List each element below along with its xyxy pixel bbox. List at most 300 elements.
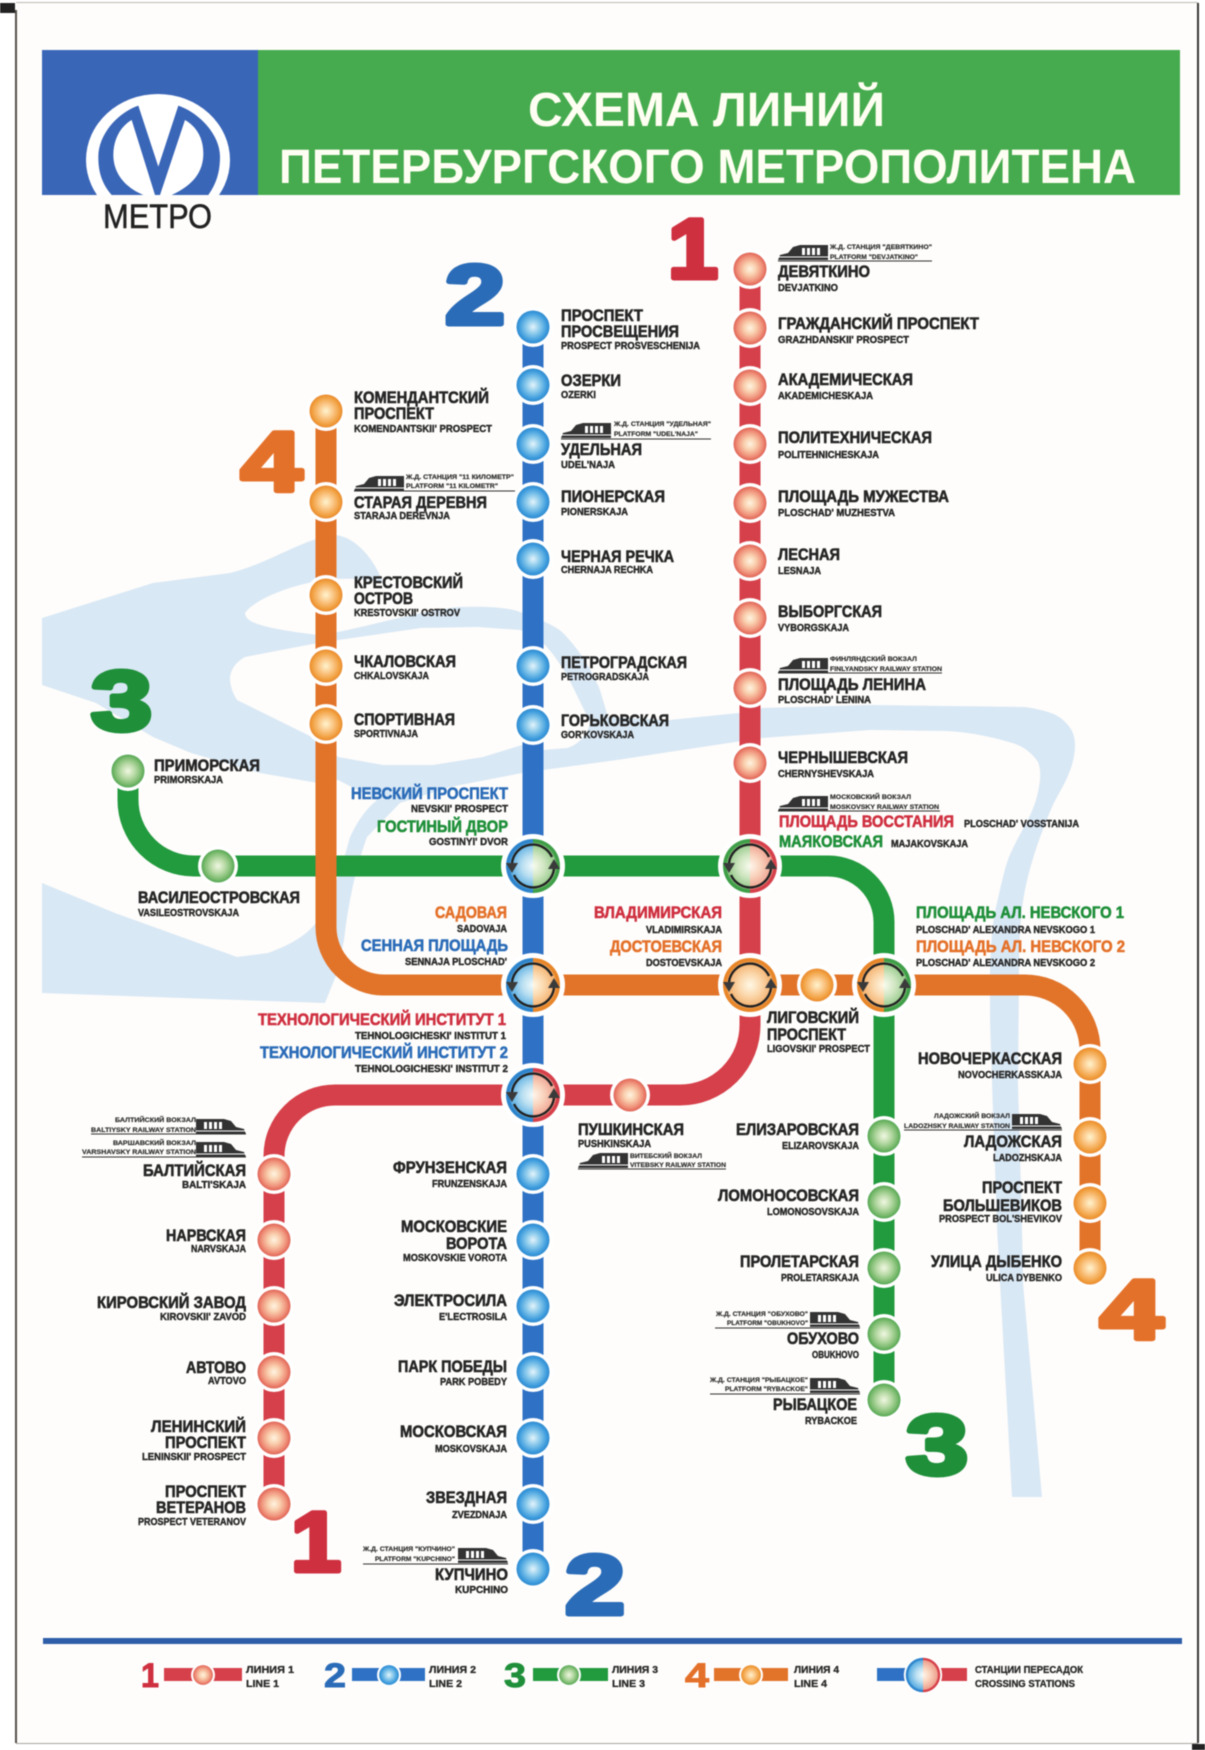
label Московская: MOSKOVSKAJA	[435, 1444, 507, 1455]
label Электросила	[394, 1291, 507, 1323]
label Садовая: САДОВАЯ	[435, 903, 507, 922]
label Горьковская	[561, 711, 669, 741]
labels line 4 east	[904, 1049, 1063, 1284]
label Улица Дыбенко: УЛИЦА ДЫБЕНКО	[931, 1252, 1062, 1271]
label Технологический институт 2	[260, 1043, 508, 1075]
label Площадь Ленина: PLOSCHAD' LENINA	[778, 695, 871, 706]
station dot Нарвская	[254, 1220, 294, 1260]
label Владимирская	[594, 903, 722, 936]
header blue block	[42, 50, 258, 195]
legend line 3	[504, 1657, 658, 1695]
label Технологический институт 1: ТЕХНОЛОГИЧЕСКИЙ ИНСТИТУТ 1	[258, 1010, 506, 1029]
label Гражданский проспект	[778, 314, 980, 346]
label Нарвская: NARVSKAJA	[191, 1244, 246, 1255]
Petrograd island	[230, 627, 590, 765]
label Фрунзенская: FRUNZENSKAJA	[432, 1179, 507, 1190]
line 1 red	[274, 269, 750, 1504]
number 4 right: 4	[1100, 1263, 1163, 1357]
legend line 1: ЛИНИЯ 1	[246, 1664, 294, 1676]
label Московские ворота: MOSKOVSKIE VOROTA	[403, 1253, 507, 1264]
station dot Купчино	[513, 1549, 553, 1589]
number 3 bottom: 3	[906, 1398, 968, 1492]
legend line 2: LINE 2	[429, 1678, 462, 1690]
label Елизаровская: ЕЛИЗАРОВСКАЯ	[736, 1120, 859, 1139]
label Площадь Восстания: MOSKOVSKY RAILWAY STATION	[830, 804, 939, 811]
label Ломоносовская: LOMONOSOVSKAJA	[767, 1207, 859, 1218]
label Нарвская	[166, 1226, 246, 1255]
station dot Гражданский проспект	[730, 308, 770, 348]
label Черная речка	[561, 547, 674, 576]
labels centre crossings	[258, 784, 1125, 1169]
railway note Варшавский вокзал: ВАРШАВСКИЙ ВОКЗАЛ	[113, 1138, 196, 1147]
number 1 top: 1	[668, 202, 718, 296]
label Пушкинская: VITEBSKY RAILWAY STATION	[630, 1162, 726, 1169]
label Чкаловская	[354, 652, 456, 682]
big line numbers	[91, 202, 1163, 1632]
label Ленинский проспект	[142, 1417, 247, 1463]
label Крестовский остров: КРЕСТОВСКИЙ	[354, 573, 463, 592]
label Лесная	[778, 545, 840, 577]
station dot Василеостровская	[198, 846, 238, 886]
label Садовая	[435, 903, 507, 935]
legend line 4: LINE 4	[794, 1678, 827, 1690]
label Пушкинская: ПУШКИНСКАЯ	[578, 1120, 684, 1139]
label Кировский завод	[97, 1293, 246, 1323]
station dot Московская	[513, 1418, 553, 1458]
station dot Старая деревня	[306, 482, 346, 522]
labels line 3 south	[709, 1120, 860, 1427]
crossing Технологический институт	[501, 1063, 565, 1127]
label Крестовский остров: ОСТРОВ	[354, 589, 413, 608]
label Петроградская	[561, 653, 687, 683]
label Елизаровская: ELIZAROVSKAJA	[782, 1141, 859, 1152]
label Автово: АВТОВО	[186, 1358, 246, 1377]
label Приморская	[154, 756, 260, 786]
label Комендантский проспект	[354, 388, 492, 435]
label Парк Победы	[398, 1357, 507, 1388]
label Девяткино	[778, 244, 932, 294]
card edge right	[1197, 3, 1199, 1743]
label Звездная	[426, 1488, 507, 1521]
label Пионерская	[561, 487, 665, 518]
label Лиговский проспект: LIGOVSKII' PROSPECT	[767, 1044, 870, 1055]
label Новочеркасская: NOVOCHERKASSKAJA	[958, 1070, 1062, 1081]
label Электросила: ЭЛЕКТРОСИЛА	[394, 1291, 507, 1310]
label Лесная: ЛЕСНАЯ	[778, 545, 840, 564]
stations line 3	[108, 751, 904, 1420]
header panel	[42, 50, 1180, 195]
number 2 bottom: 2	[565, 1538, 625, 1632]
footer divider	[43, 1638, 1182, 1644]
line 3 green	[128, 771, 884, 1400]
number 3 left: 3	[91, 654, 152, 748]
labels line 2 lower	[362, 1158, 508, 1596]
legend	[141, 1656, 1084, 1695]
station dot Приморская	[108, 751, 148, 791]
station dot Кировский завод	[254, 1286, 294, 1326]
station dot Площадь Ленина	[730, 668, 770, 708]
label Площадь Ленина: ФИНЛЯНДСКИЙ ВОКЗАЛ	[830, 654, 917, 663]
label Московские ворота: МОСКОВСКИЕ	[401, 1217, 507, 1236]
stations line 1	[254, 249, 770, 1524]
label Гостиный двор: ГОСТИНЫЙ ДВОР	[377, 817, 508, 836]
label Девяткино: PLATFORM "DEVJATKINO"	[830, 254, 918, 261]
label Улица Дыбенко	[931, 1252, 1062, 1284]
label Ладожская: ЛАДОЖСКИЙ ВОКЗАЛ	[934, 1111, 1010, 1120]
label Ленинский проспект: LENINSKII' PROSPECT	[142, 1452, 246, 1463]
label Площадь Ленина: FINLYANDSKY RAILWAY STATION	[830, 666, 942, 673]
label Балтийская	[143, 1161, 246, 1191]
railway note Варшавский вокзал: VARSHAVSKY RAILWAY STATION	[82, 1149, 196, 1156]
label Ладожская: LADOZHSKAJA	[993, 1153, 1062, 1164]
label Лиговский проспект: ПРОСПЕКТ	[767, 1025, 847, 1044]
label Купчино: KUPCHINO	[455, 1585, 508, 1596]
label Проспект Большевиков: PROSPECT BOL'SHEVIKOV	[939, 1214, 1062, 1225]
label Гостиный двор	[377, 817, 509, 848]
label Площадь Мужества: PLOSCHAD' MUZHESTVA	[778, 508, 895, 519]
label Звездная: ЗВЕЗДНАЯ	[426, 1488, 507, 1507]
label Проспект Большевиков: БОЛЬШЕВИКОВ	[943, 1196, 1062, 1215]
legend crossing stations: СТАНЦИИ ПЕРЕСАДОК	[975, 1664, 1084, 1676]
label Технологический институт 1	[258, 1010, 506, 1042]
label Удельная: PLATFORM "UDEL'NAJA"	[614, 431, 698, 438]
water: rivers	[42, 535, 1075, 1497]
label Проспект Просвещения: PROSPECT PROSVESCHENIJA	[561, 341, 700, 352]
line 2 blue	[522, 327, 544, 1569]
label Ладожская	[904, 1111, 1062, 1164]
station dot Горьковская	[513, 705, 553, 745]
label Владимирская: VLADIMIRSKAJA	[646, 925, 722, 936]
station dot Пролетарская	[864, 1248, 904, 1288]
label Проспект Ветеранов: PROSPECT VETERANOV	[138, 1517, 246, 1528]
header green block	[258, 50, 1180, 195]
label Старая деревня	[354, 474, 515, 522]
label Купчино: PLATFORM "KUPCHINO"	[375, 1556, 455, 1563]
label Обухово: OBUKHOVO	[812, 1350, 859, 1361]
label Балтийская: БАЛТИЙСКАЯ	[143, 1161, 246, 1180]
label Площадь Ал. Невского 1: ПЛОЩАДЬ АЛ. НЕВСКОГО 1	[916, 903, 1124, 922]
label Проспект Просвещения: ПРОСВЕЩЕНИЯ	[561, 322, 679, 341]
label Кировский завод: КИРОВСКИЙ ЗАВОД	[97, 1293, 246, 1312]
label Достоевская: ДОСТОЕВСКАЯ	[610, 937, 722, 956]
legend crossing stations	[877, 1656, 1084, 1694]
station dot Комендантский проспект	[306, 391, 346, 431]
label Пролетарская	[740, 1252, 859, 1284]
label Обухово	[715, 1311, 860, 1361]
label Чернышевская: CHERNYSHEVSKAJA	[778, 769, 874, 780]
label Выборгская	[778, 602, 882, 634]
logo word: МЕТРО	[103, 198, 212, 236]
label Рыбацкое	[709, 1377, 860, 1427]
label Площадь Ал. Невского 2	[916, 937, 1125, 969]
station dot Ленинский проспект	[254, 1418, 294, 1458]
crossing stations	[501, 834, 916, 1127]
label Площадь Мужества	[778, 487, 949, 519]
title line 1: СХЕМА ЛИНИЙ	[528, 82, 885, 137]
label Чкаловская: CHKALOVSKAJA	[354, 671, 429, 682]
station dot Площадь Мужества	[730, 483, 770, 523]
station dot Озерки	[513, 365, 553, 405]
label Академическая	[778, 370, 913, 402]
label Обухово: ОБУХОВО	[787, 1329, 859, 1348]
legend line 3: 3	[504, 1657, 526, 1695]
label Площадь Восстания	[778, 792, 1079, 831]
label Озерки: OZERKI	[561, 390, 596, 401]
crossing Садовая / Сенная площадь	[501, 953, 565, 1017]
label Пролетарская: ПРОЛЕТАРСКАЯ	[740, 1252, 859, 1271]
legend line 2	[324, 1657, 476, 1695]
legend line 1: LINE 1	[246, 1678, 279, 1690]
station dot Академическая	[730, 366, 770, 406]
label Девяткино: ДЕВЯТКИНО	[778, 262, 870, 281]
label Балтийская: BALTI'SKAJA	[182, 1180, 246, 1191]
label Площадь Ленина	[778, 654, 942, 706]
label Академическая: АКАДЕМИЧЕСКАЯ	[778, 370, 913, 389]
label Купчино	[362, 1546, 508, 1596]
label Политехническая	[778, 428, 932, 461]
card edge left	[15, 10, 17, 1743]
label Василеостровская	[138, 888, 300, 919]
label Парк Победы: PARK POBEDY	[440, 1377, 507, 1388]
station dot Чкаловская	[306, 646, 346, 686]
label Технологический институт 1: TEHNOLOGICHESKI' INSTITUT 1	[355, 1031, 506, 1042]
legend line 4	[685, 1657, 839, 1695]
label Пролетарская: PROLETARSKAJA	[781, 1273, 859, 1284]
label Сенная площадь: SENNAJA PLOSCHAD'	[405, 957, 507, 968]
label Удельная: Ж.Д. СТАНЦИЯ "УДЕЛЬНАЯ"	[613, 421, 711, 428]
label Комендантский проспект: КОМЕНДАНТСКИЙ	[354, 388, 489, 407]
station dot Лиговский проспект	[797, 965, 837, 1005]
label Проспект Большевиков	[939, 1178, 1063, 1225]
station dot Девяткино	[730, 249, 770, 289]
label Проспект Ветеранов: ПРОСПЕКТ	[165, 1482, 247, 1501]
legend line 1	[141, 1657, 294, 1695]
labels line 4 upper and line 3 west	[138, 388, 515, 919]
station dot Ломоносовская	[864, 1182, 904, 1222]
label Парк Победы: ПАРК ПОБЕДЫ	[398, 1357, 507, 1376]
number 4 left: 4	[241, 415, 302, 509]
label Ломоносовская: ЛОМОНОСОВСКАЯ	[718, 1186, 859, 1205]
label Проспект Ветеранов	[138, 1482, 247, 1528]
label Нарвская: НАРВСКАЯ	[166, 1226, 246, 1245]
station dot Удельная	[513, 424, 553, 464]
railway note Варшавский вокзал	[82, 1138, 246, 1157]
station dot Обухово	[864, 1314, 904, 1354]
label Садовая: SADOVAJA	[457, 924, 507, 935]
label Сенная площадь: СЕННАЯ ПЛОЩАДЬ	[361, 936, 508, 955]
label Пушкинская: PUSHKINSKAJA	[578, 1139, 651, 1150]
label Купчино: КУПЧИНО	[435, 1565, 508, 1584]
label Пионерская: ПИОНЕРСКАЯ	[561, 487, 665, 506]
label Московская: МОСКОВСКАЯ	[400, 1422, 507, 1441]
station dot Елизаровская	[864, 1116, 904, 1156]
label Ладожская: LADOZHSKY RAILWAY STATION	[904, 1123, 1010, 1130]
station dot Спортивная	[306, 704, 346, 744]
station dot Проспект Ветеранов	[254, 1484, 294, 1524]
label Автово: AVTOVO	[208, 1376, 246, 1387]
railway note Балтийский вокзал: BALTIYSKY RAILWAY STATION	[91, 1127, 196, 1134]
station dot Электросила	[513, 1286, 553, 1326]
label Спортивная	[354, 710, 455, 740]
legend line 2: 2	[324, 1657, 346, 1695]
station dot Политехническая	[730, 424, 770, 464]
label Василеостровская: ВАСИЛЕОСТРОВСКАЯ	[138, 888, 300, 907]
label Спортивная: СПОРТИВНАЯ	[354, 710, 455, 729]
label Звездная: ZVEZDNAJA	[452, 1510, 507, 1521]
label Обухово: PLATFORM "OBUKHOVO"	[727, 1320, 808, 1327]
label Комендантский проспект: ПРОСПЕКТ	[354, 404, 435, 423]
label Московские ворота	[401, 1217, 507, 1264]
station dot Пушкинская	[610, 1075, 650, 1115]
label Удельная	[561, 421, 711, 471]
label Озерки: ОЗЕРКИ	[561, 371, 621, 390]
label Фрунзенская: ФРУНЗЕНСКАЯ	[393, 1158, 507, 1177]
label Старая деревня: STARAJA DEREVNJA	[354, 511, 450, 522]
labels line 1 lower	[82, 1115, 247, 1528]
station dot Выборгская	[730, 598, 770, 638]
station dot Балтийская	[254, 1154, 294, 1194]
station dot Лесная	[730, 541, 770, 581]
label Озерки	[561, 371, 621, 401]
label Сенная площадь	[361, 936, 508, 968]
label Приморская: ПРИМОРСКАЯ	[154, 756, 260, 775]
label Чкаловская: ЧКАЛОВСКАЯ	[354, 652, 456, 671]
label Политехническая: POLITEHNICHESKAJA	[778, 450, 879, 461]
label Обухово: Ж.Д. СТАНЦИЯ "ОБУХОВО"	[715, 1311, 808, 1318]
legend line 4: ЛИНИЯ 4	[794, 1664, 839, 1676]
label Крестовский остров	[354, 573, 463, 619]
railway note Балтийский вокзал: БАЛТИЙСКИЙ ВОКЗАЛ	[115, 1115, 196, 1124]
station dot Пионерская	[513, 482, 553, 522]
labels line 1 upper	[778, 244, 1079, 851]
labels line 2 upper	[561, 306, 711, 741]
label Маяковская: MAJAKOVSKAJA	[891, 839, 968, 850]
label Ленинский проспект: ЛЕНИНСКИЙ	[151, 1417, 246, 1436]
label Горьковская: GOR'KOVSKAJA	[561, 730, 634, 741]
label Площадь Ленина: ПЛОЩАДЬ ЛЕНИНА	[778, 675, 926, 694]
label Черная речка: ЧЕРНАЯ РЕЧКА	[561, 547, 674, 566]
label Крестовский остров: KRESTOVSKII' OSTROV	[354, 608, 460, 619]
station dot Улица Дыбенко	[1070, 1248, 1110, 1288]
crossing Площадь Александра Невского	[852, 953, 916, 1017]
label Девяткино: DEVJATKINO	[778, 283, 838, 294]
label Невский проспект: NEVSKII' PROSPECT	[411, 804, 508, 815]
label Площадь Восстания: ПЛОЩАДЬ ВОССТАНИЯ	[779, 812, 954, 831]
label Технологический институт 2: TEHNOLOGICHESKI' INSTITUT 2	[355, 1064, 508, 1075]
label Рыбацкое: РЫБАЦКОЕ	[773, 1395, 857, 1414]
label Проспект Просвещения	[561, 306, 700, 352]
label Старая деревня: PLATFORM "11 KILOMETR"	[406, 483, 498, 490]
label Спортивная: SPORTIVNAJA	[354, 729, 418, 740]
station dot Автово	[254, 1352, 294, 1392]
label Площадь Восстания: МОСКОВСКИЙ ВОКЗАЛ	[830, 792, 911, 801]
label Старая деревня: СТАРАЯ ДЕРЕВНЯ	[354, 493, 487, 512]
label Невский проспект: НЕВСКИЙ ПРОСПЕКТ	[351, 784, 509, 803]
line 4 orange	[326, 411, 1090, 1268]
label Купчино: Ж.Д. СТАНЦИЯ "КУПЧИНО"	[362, 1546, 455, 1553]
logo emblem	[85, 93, 231, 196]
label Владимирская: ВЛАДИМИРСКАЯ	[594, 903, 722, 922]
river Neva and branches	[42, 535, 1075, 1497]
label Петроградская: PETROGRADSKAJA	[561, 672, 649, 683]
label Гостиный двор: GOSTINYI' DVOR	[429, 837, 509, 848]
legend line 1: 1	[141, 1657, 159, 1695]
label Проспект Ветеранов: ВЕТЕРАНОВ	[156, 1498, 246, 1517]
label Лесная: LESNAJA	[778, 566, 821, 577]
label Кировский завод: KIROVSKII' ZAVOD	[160, 1312, 246, 1323]
legend line 3: ЛИНИЯ 3	[612, 1664, 658, 1676]
station dot Звездная	[513, 1484, 553, 1524]
card edge top	[16, 2, 1198, 3]
station dot Рыбацкое	[864, 1380, 904, 1420]
label Пушкинская: ВИТЕБСКИЙ ВОКЗАЛ	[630, 1151, 702, 1160]
label Девяткино: Ж.Д. СТАНЦИЯ "ДЕВЯТКИНО"	[829, 244, 932, 251]
station dot Проспект Просвещения	[513, 307, 553, 347]
label Ладожская: ЛАДОЖСКАЯ	[964, 1132, 1062, 1151]
number 1 bottom: 1	[291, 1495, 341, 1589]
legend line 2: ЛИНИЯ 2	[429, 1664, 476, 1676]
label Площадь Мужества: ПЛОЩАДЬ МУЖЕСТВА	[778, 487, 949, 506]
label Комендантский проспект: KOMENDANTSKII' PROSPECT	[354, 424, 492, 435]
label Автово	[186, 1358, 246, 1387]
label Чернышевская: ЧЕРНЫШЕВСКАЯ	[778, 748, 908, 767]
legend crossing stations: CROSSING STATIONS	[975, 1678, 1075, 1690]
station dot Парк Победы	[513, 1352, 553, 1392]
label Технологический институт 2: ТЕХНОЛОГИЧЕСКИЙ ИНСТИТУТ 2	[260, 1043, 508, 1062]
label Достоевская: DOSTOEVSKAJA	[646, 958, 722, 969]
label Ленинский проспект: ПРОСПЕКТ	[165, 1433, 247, 1452]
label Площадь Ал. Невского 1: PLOSCHAD' ALEXANDRA NEVSKOGO 1	[916, 925, 1095, 936]
label Пушкинская	[578, 1120, 726, 1169]
metro lines	[128, 269, 1090, 1569]
station dot Черная речка	[513, 539, 553, 579]
metro logo	[86, 94, 230, 236]
label Невский проспект	[351, 784, 509, 815]
legend line 4: 4	[685, 1657, 709, 1695]
station dot Проспект Большевиков	[1070, 1183, 1110, 1223]
label Проспект Просвещения: ПРОСПЕКТ	[561, 306, 644, 325]
card edge bottom	[16, 1743, 1198, 1744]
station dot Новочеркасская	[1070, 1044, 1110, 1084]
scan corner top left	[0, 3, 15, 13]
label Рыбацкое: PLATFORM "RYBACKOE"	[725, 1386, 808, 1393]
railway note Балтийский вокзал	[91, 1115, 246, 1134]
station dot Московские ворота	[513, 1220, 553, 1260]
label Приморская: PRIMORSKAJA	[154, 775, 223, 786]
label Фрунзенская	[393, 1158, 507, 1190]
label Чернышевская	[778, 748, 908, 780]
legend line 3: LINE 3	[612, 1678, 645, 1690]
station dot Чернышевская	[730, 743, 770, 783]
station dot Крестовский остров	[306, 575, 346, 615]
label Рыбацкое: Ж.Д. СТАНЦИЯ "РЫБАЦКОЕ"	[709, 1377, 808, 1384]
label Василеостровская: VASILEOSTROVSKAJA	[138, 908, 239, 919]
station dot Фрунзенская	[513, 1154, 553, 1194]
label Московские ворота: ВОРОТА	[446, 1234, 507, 1253]
label Гражданский проспект: ГРАЖДАНСКИЙ ПРОСПЕКТ	[778, 314, 980, 333]
label Маяковская: МАЯКОВСКАЯ	[779, 832, 883, 851]
crossing Невский проспект / Гостиный двор	[501, 834, 565, 898]
label Выборгская: VYBORGSKAJA	[778, 623, 849, 634]
label Новочеркасская: НОВОЧЕРКАССКАЯ	[918, 1049, 1062, 1068]
label Лиговский проспект: ЛИГОВСКИЙ	[767, 1008, 859, 1027]
label Петроградская: ПЕТРОГРАДСКАЯ	[561, 653, 687, 672]
label Черная речка: CHERNAJA RECHKA	[561, 565, 653, 576]
label Площадь Ал. Невского 1	[916, 903, 1124, 936]
label Московская	[400, 1422, 507, 1455]
crossing Площадь Восстания / Маяковская	[718, 834, 782, 898]
scan corner bottom right	[1192, 1744, 1205, 1750]
